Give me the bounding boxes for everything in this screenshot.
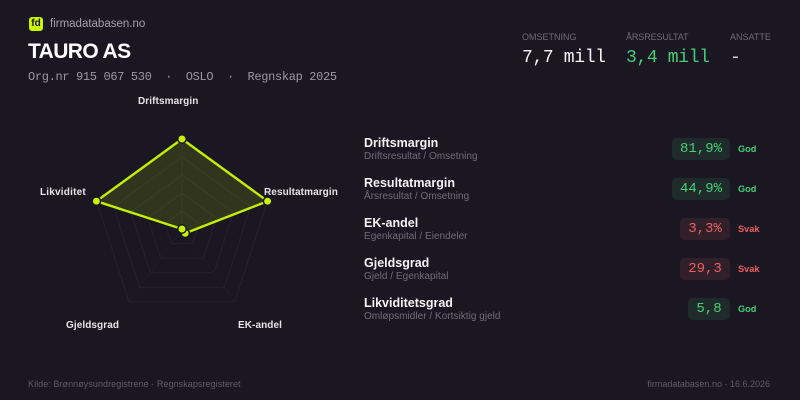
row: EK-andel: Svak [738, 224, 759, 234]
brand name: firmadatabasen.no [50, 18, 145, 30]
footer source: Kilde: Brønnøysundregistrene · Regnskapsregisteret [28, 379, 241, 389]
stat: årsresultat: ÅRSRESULTAT [626, 32, 688, 42]
row: Resultatmargin: God [738, 184, 756, 194]
row: Driftsmargin [364, 136, 756, 162]
row: Gjeldsgrad: Svak [738, 264, 759, 274]
stat: årsresultat [626, 32, 710, 68]
stat: ansatte [730, 32, 771, 68]
row: Gjeldsgrad: Gjeldsgrad [364, 256, 429, 270]
row: Likviditetsgrad: 5,8 [696, 301, 722, 317]
data points [92, 135, 272, 238]
row: Gjeldsgrad [364, 256, 760, 282]
radar label: Likviditet: Likviditet [40, 187, 86, 198]
row: Likviditetsgrad: Omløpsmidler / Kortsiktig gjeld [364, 311, 501, 322]
radar label: Gjeldsgrad: Gjeldsgrad [66, 320, 119, 331]
radar label: EK-andel: EK-andel [238, 320, 282, 331]
radar chart [92, 136, 272, 302]
row: Likviditetsgrad: God [738, 304, 756, 314]
row: Resultatmargin: 44,9% [680, 181, 722, 197]
row: Gjeldsgrad: Gjeld / Egenkapital [364, 271, 449, 282]
company subtitle: Org.nr 915 067 530 · OSLO · Regnskap 2025 [28, 70, 337, 84]
company title: TAURO AS [28, 40, 131, 63]
logo icon [29, 17, 43, 31]
footer site and date: firmadatabasen.no · 16.6.2026 [647, 379, 770, 389]
row: Resultatmargin: Resultatmargin [364, 176, 455, 190]
stat: ansatte: ANSATTE [730, 32, 771, 42]
stat: årsresultat: 3,4 mill [626, 48, 710, 68]
radar label: Driftsmargin: Driftsmargin [138, 96, 198, 107]
row: Likviditetsgrad [364, 296, 756, 322]
stat: omsetning [522, 32, 606, 68]
row: EK-andel: Egenkapital / Eiendeler [364, 231, 468, 242]
radar label: Resultatmargin: Resultatmargin [264, 187, 338, 198]
row: Driftsmargin: 81,9% [680, 141, 722, 157]
row: Driftsmargin: God [738, 144, 756, 154]
stat: omsetning: OMSETNING [522, 32, 577, 42]
stat: omsetning: 7,7 mill [522, 48, 606, 68]
logo icon: fd [31, 18, 41, 29]
row: EK-andel: EK-andel [364, 216, 418, 230]
row: Resultatmargin [364, 176, 756, 202]
data polygon [96, 139, 268, 233]
row: EK-andel [364, 216, 760, 242]
row: Gjeldsgrad: 29,3 [688, 261, 722, 277]
row: EK-andel: 3,3% [688, 221, 722, 237]
row: Resultatmargin: Årsresultat / Omsetning [364, 191, 469, 202]
row: Likviditetsgrad: Likviditetsgrad [364, 296, 453, 310]
row: Driftsmargin: Driftsmargin [364, 136, 438, 150]
row: Driftsmargin: Driftsresultat / Omsetning [364, 151, 478, 162]
stat: ansatte: - [730, 48, 740, 68]
